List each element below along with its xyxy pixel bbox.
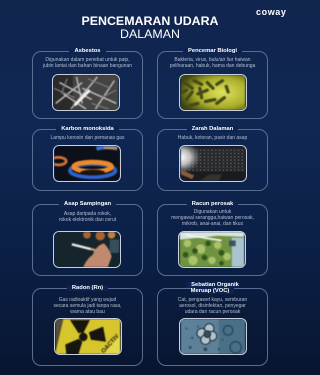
text: Sebatian Organik Meruap (VOC)	[178, 296, 247, 315]
text: Racun perosak: mikrob, anai-anai, dan tikus	[182, 221, 243, 227]
heading: Sebatian Organik Meruap (VOC): Sebatian Organik	[191, 282, 239, 288]
text: Pencemar Biologi: Bakteria, virus, bulu/air liur haiwan	[174, 57, 251, 63]
photo: bacteria	[179, 74, 247, 111]
heading: Sebatian Organik Meruap (VOC)	[186, 282, 239, 294]
title: DALAMAN	[120, 27, 180, 41]
text: Asap Sampingan: rokok elektronik dan cerut	[59, 217, 116, 223]
text: Zarah Dalaman: Habuk, kotoran, pasir dan asap	[178, 135, 247, 141]
photo: gas flame	[53, 145, 121, 182]
photo: cigarette	[53, 231, 121, 268]
text: Pencemar Biologi: peliharaan, habuk, hama dan debunga	[170, 63, 255, 69]
panel: Sebatian Organik Meruap (VOC)	[157, 288, 268, 366]
panel: Karbon monoksida	[32, 129, 143, 191]
text: Karbon monoksida: Lampu kerosin dan pemanas gas	[51, 135, 124, 141]
photo: dust particles	[179, 145, 247, 182]
text: Asbestos	[42, 57, 132, 69]
logo: coway: coway	[256, 7, 287, 17]
text: Radon (Rn)	[53, 296, 122, 315]
panel: Zarah Dalaman	[157, 129, 268, 191]
text: Asbestos: Digunakan dalam penebat untuk paip,	[45, 57, 130, 63]
text: Pencemar Biologi	[170, 57, 256, 69]
photo: asbestos fibres	[52, 74, 120, 111]
text: Sebatian Organik Meruap (VOC): Cat, pengawet kayu, semburan	[178, 296, 247, 302]
text: Asap Sampingan: Asap daripada rokok,	[64, 211, 111, 217]
text: Racun perosak	[171, 208, 254, 227]
heading: Pencemar Biologi: Pencemar Biologi	[188, 48, 237, 54]
heading: Asap Sampingan: Asap Sampingan	[64, 201, 111, 207]
text: Radon (Rn): secara semula jadi tanpa rasa,	[53, 303, 122, 309]
heading: Asbestos: Asbestos	[74, 48, 101, 54]
photo: pesticide spraying	[178, 231, 246, 268]
heading: Radon (Rn): Radon (Rn)	[72, 285, 103, 291]
text: Racun perosak: mengawal serangga,haiwan perosak,	[171, 215, 254, 221]
title	[82, 14, 218, 41]
photo: VOC molecules	[179, 318, 247, 355]
panel: Asap Sampingan	[32, 204, 143, 276]
text: Radon (Rn): Gas radioaktif yang wujud	[59, 296, 116, 302]
title: PENCEMARAN UDARA	[82, 14, 218, 28]
panel: Radon (Rn)	[32, 288, 143, 366]
heading: Karbon monoksida: Karbon monoksida	[61, 126, 114, 132]
panel: Asbestos	[32, 51, 143, 119]
panel: Pencemar Biologi	[157, 51, 268, 119]
text: Asbestos: jubin lantai dan bahan binaan bangunan	[43, 63, 132, 69]
text: Sebatian Organik Meruap (VOC): aerosol, disinfektan, penyegar	[179, 303, 246, 309]
text: Asap Sampingan	[59, 211, 116, 223]
heading: Zarah Dalaman: Zarah Dalaman	[192, 126, 233, 132]
heading: Racun perosak: Racun perosak	[192, 201, 233, 207]
panel: Racun perosak	[157, 204, 268, 276]
text: Sebatian Organik Meruap (VOC): udara dan racun perosak	[185, 309, 240, 315]
text: Radon (Rn): warna atau bau	[70, 309, 105, 315]
photo: radiation sign	[54, 318, 122, 355]
heading: Sebatian Organik Meruap (VOC): Meruap (VOC)	[191, 288, 229, 294]
text: Racun perosak: Digunakan untuk	[194, 208, 231, 214]
